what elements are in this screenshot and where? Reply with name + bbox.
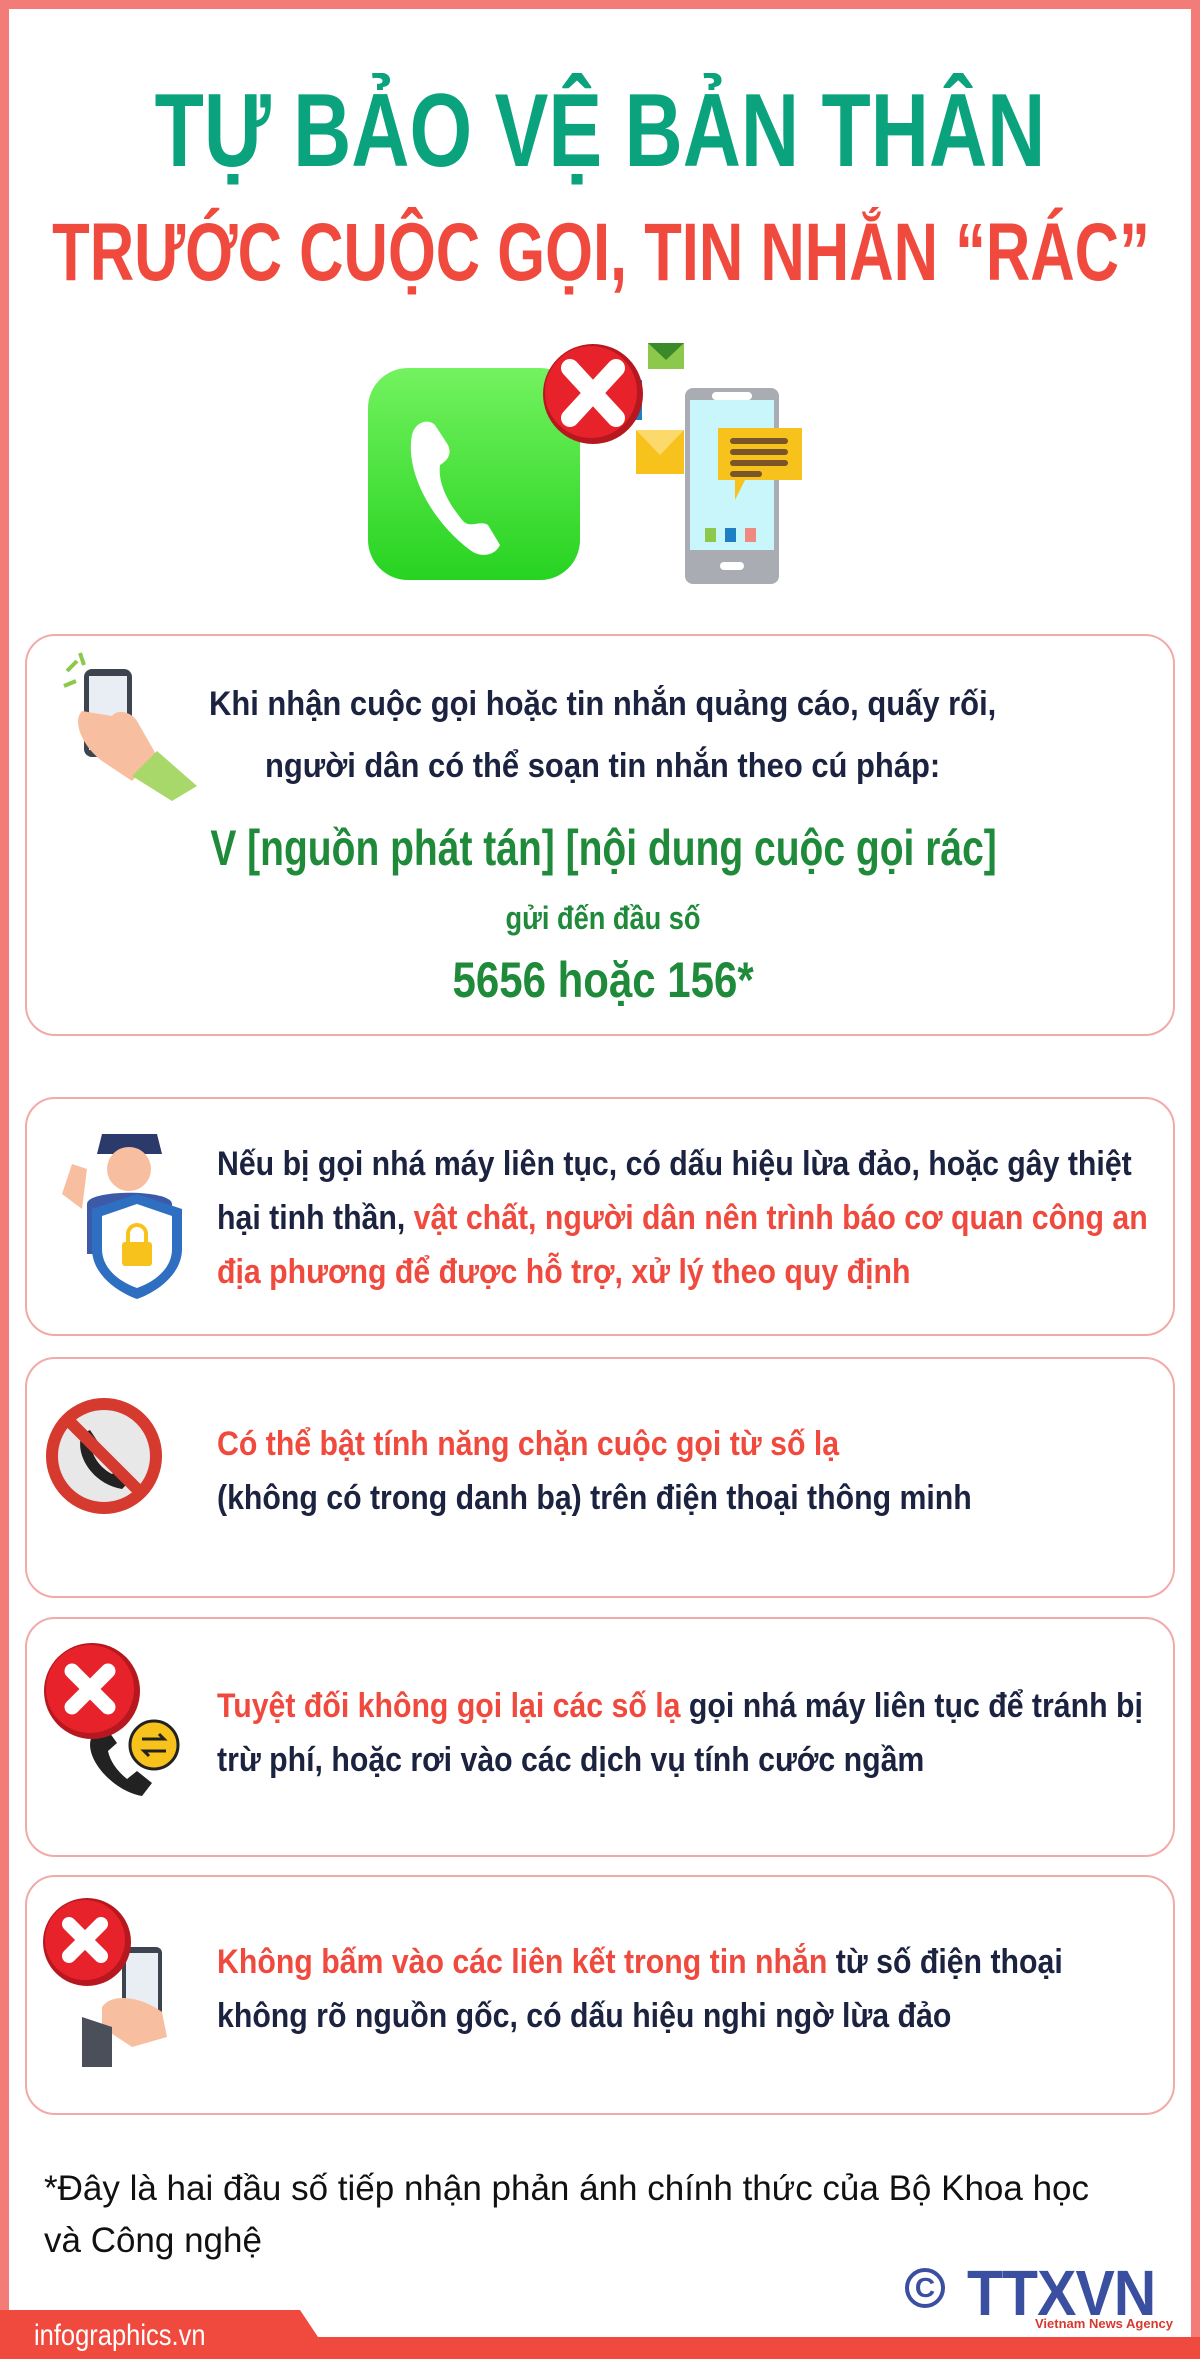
text: instructions: 5656 hoặc 156* [453,952,754,1008]
text [217,1943,1063,2035]
logo: TTXVN: Vietnam News Agency [1035,2316,1173,2331]
footnote: *Đây là hai đầu số tiếp nhận phản ánh chính thức của Bộ Khoa học [44,2169,1089,2208]
text: instructions: gửi đến đầu số [506,900,701,936]
text [217,1425,972,1517]
panel 3: block unknown numbers [25,1357,1175,1598]
text: instructions: người dân có thể soạn tin nhắn theo cú pháp: [265,747,940,785]
footer text: infographics.vn [34,2319,206,2352]
text: (không có trong danh bạ) trên điện thoại thông minh [217,1479,972,1517]
text: instructions [209,685,997,1008]
text: địa phương để được hỗ trợ, xử lý theo quy định [217,1253,910,1291]
panel 2: report to police [25,1097,1175,1336]
panel 5: do not click links [25,1875,1175,2115]
text: Tuyệt đối không gọi lại các số lạ gọi nhá máy liên tục để tránh bị [217,1687,1143,1725]
text: hại tinh thần, vật chất, người dân nên trình báo cơ quan công an [217,1199,1148,1237]
title line 1: TỰ BẢO VỆ BẢN THÂN [155,73,1045,189]
text [217,1687,1143,1779]
footnote: và Công nghệ [44,2221,262,2260]
text: Không bấm vào các liên kết trong tin nhắn từ số điện thoại [217,1943,1063,1981]
text: không rõ nguồn gốc, có dấu hiệu nghi ngờ lừa đảo [217,1997,951,2035]
icon: hand holding phone [63,652,197,801]
icon: no phone sign [46,1398,162,1514]
panel 1: report syntax [25,634,1175,1036]
footer bar [0,2310,1200,2359]
logo: TTXVN: C [915,2272,935,2303]
text: trừ phí, hoặc rơi vào các dịch vụ tính cước ngầm [217,1741,924,1779]
footnote [44,2169,1089,2260]
logo: TTXVN: TTXVN [967,2257,1155,2329]
text: Có thể bật tính năng chặn cuộc gọi từ số lạ [217,1425,839,1463]
icon: X with hand and phone [43,1898,167,2067]
panel 4: do not call back [25,1617,1175,1857]
text: instructions: Khi nhận cuộc gọi hoặc tin nhắn quảng cáo, quấy rối, [209,685,996,723]
title line 2: TRƯỚC CUỘC GỌI, TIN NHẮN “RÁC” [52,207,1150,298]
icon: X with phone and swap [44,1643,180,1796]
icon: police with shield [62,1134,182,1299]
text: instructions: V [nguồn phát tán] [nội dung cuộc gọi rác] [210,820,997,876]
text: Nếu bị gọi nhá máy liên tục, có dấu hiệu lừa đảo, hoặc gây thiệt [217,1145,1132,1183]
logo: TTXVN [905,2257,1173,2331]
hero illustration: phone call blocked and messages [368,343,802,584]
text [217,1145,1148,1291]
